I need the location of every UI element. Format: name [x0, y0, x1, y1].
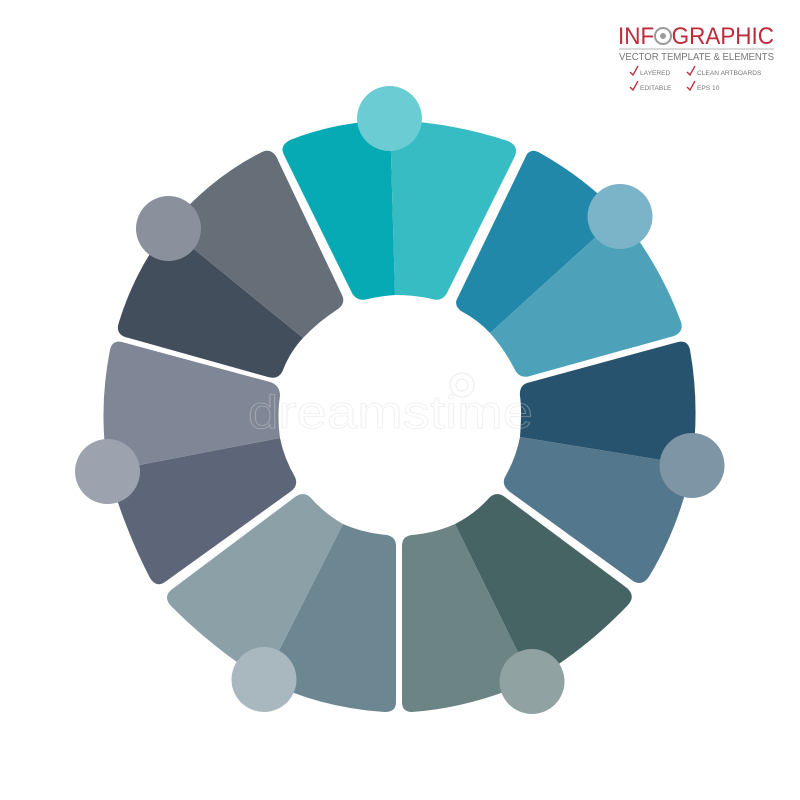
watermark — [248, 373, 533, 438]
logo block — [618, 23, 774, 92]
feature: editable — [630, 81, 672, 92]
icon: logo target — [655, 28, 671, 44]
panel: segment 5 grey-teal — [167, 494, 396, 712]
feature: layered: LAYERED — [640, 70, 671, 77]
feature: layered — [630, 66, 671, 77]
panel: segment 6 slate — [103, 342, 296, 584]
feature: editable: EDITABLE — [640, 85, 672, 92]
panel: segment 2 blue — [456, 151, 682, 377]
feature: eps 10: EPS 10 — [697, 85, 720, 92]
icon: circle node lower left — [232, 647, 296, 712]
panel: segment 7 charcoal — [118, 151, 343, 378]
panel: segment 4 green — [402, 494, 632, 712]
panel: segment 3 navy — [504, 342, 696, 583]
icon: circle node top — [357, 86, 422, 151]
feature: clean artboards: CLEAN ARTBOARDS — [697, 70, 762, 77]
logo title: INFOGRAPHIC — [618, 23, 774, 50]
watermark: dreamstime — [248, 386, 533, 438]
panel: segment 1 teal — [282, 120, 516, 300]
logo subtitle: VECTOR TEMPLATE & ELEMENTS — [619, 52, 774, 63]
icon: circle node left — [75, 439, 140, 504]
feature: eps 10 — [687, 81, 720, 92]
icon: circle node lower right — [500, 649, 564, 714]
feature: clean artboards — [687, 66, 762, 77]
icon: circle node right — [660, 433, 724, 498]
icon: circle node upper left — [136, 196, 201, 261]
icon: circle node upper right — [588, 184, 652, 249]
